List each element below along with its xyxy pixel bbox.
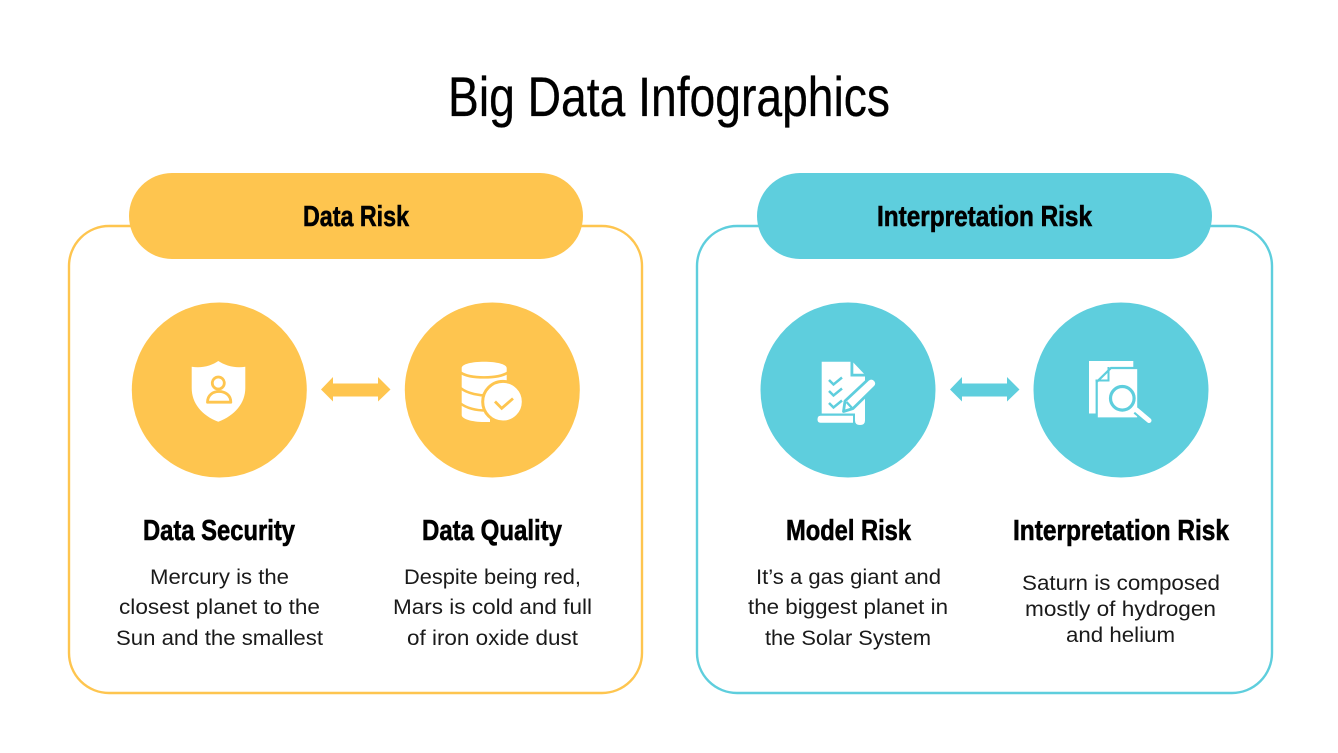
arrow: model risk to interpretation risk xyxy=(950,377,1020,402)
heading: interpretation risk: Interpretation Risk xyxy=(1013,515,1230,547)
text: model risk: the Solar System xyxy=(765,627,931,650)
text: interpretation risk xyxy=(1022,572,1220,647)
panel: data risk xyxy=(69,173,642,693)
text: data security xyxy=(116,566,323,650)
header pill: interpretation risk xyxy=(757,173,1212,259)
panel outline: interpretation risk xyxy=(697,226,1272,693)
icon: interpretation magnifier xyxy=(1034,302,1208,478)
panel: interpretation risk xyxy=(697,173,1272,693)
text: model risk: the biggest planet in xyxy=(748,596,948,619)
text: data quality: of iron oxide dust xyxy=(407,627,578,650)
text: model risk: It’s a gas giant and xyxy=(756,566,941,589)
heading: data security: Data Security xyxy=(143,515,295,547)
panel outline: data risk xyxy=(69,226,642,693)
text: interpretation risk: and helium xyxy=(1066,624,1175,647)
text: data security: Mercury is the xyxy=(150,566,289,589)
header pill: data risk xyxy=(129,173,583,259)
text: interpretation risk: mostly of hydrogen xyxy=(1025,598,1216,621)
icon: model risk checklist xyxy=(760,302,936,478)
text: model risk xyxy=(748,566,948,650)
header pill: data risk: Data Risk xyxy=(303,201,410,233)
heading: data quality: Data Quality xyxy=(422,515,562,547)
text: data security: Sun and the smallest xyxy=(116,627,323,650)
title: Big Data Infographics xyxy=(448,65,890,128)
icon: data security shield xyxy=(132,302,307,478)
text: data quality: Mars is cold and full xyxy=(393,596,592,619)
text: interpretation risk: Saturn is composed xyxy=(1022,572,1220,595)
text: data quality xyxy=(393,566,592,650)
text: data quality: Despite being red, xyxy=(404,566,581,589)
heading: model risk: Model Risk xyxy=(786,515,912,547)
icon: data quality database xyxy=(405,302,580,478)
arrow: data security to data quality xyxy=(321,377,390,402)
text: data security: closest planet to the xyxy=(119,596,320,619)
header pill: interpretation risk: Interpretation Risk xyxy=(877,201,1093,233)
